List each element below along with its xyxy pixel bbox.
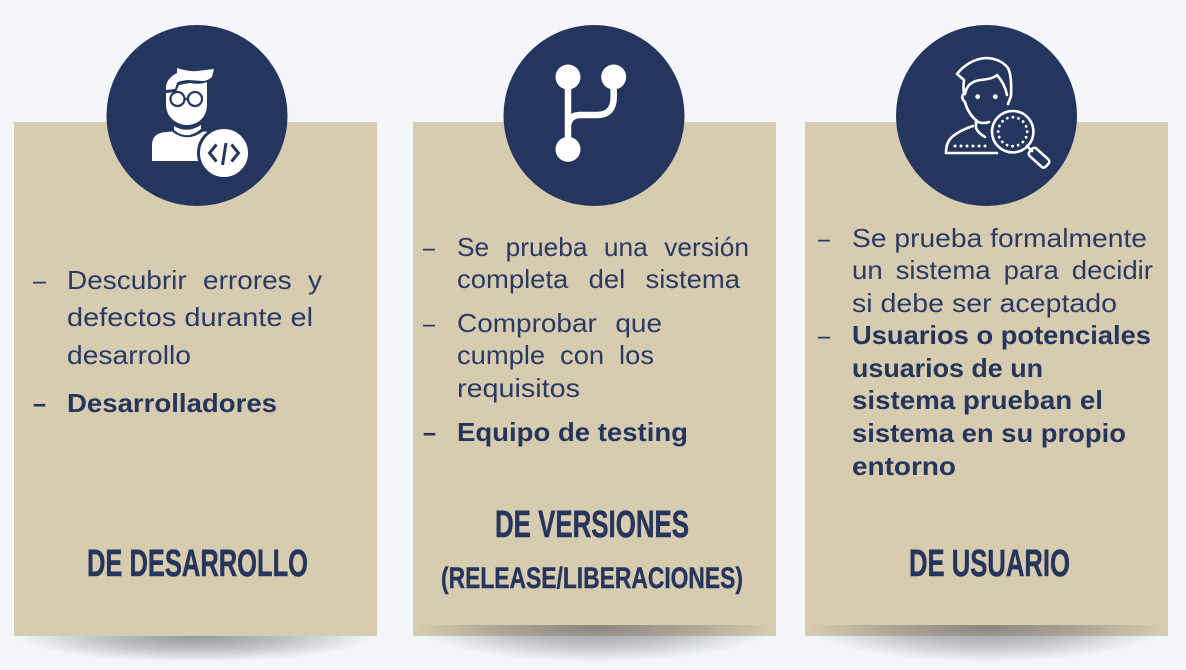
icon circle: developer (106, 25, 288, 206)
text block: description: cumple con los (457, 340, 654, 370)
heading: DE USUARIO (909, 543, 1070, 585)
text block: description: – (818, 223, 830, 253)
icon circle: branch (504, 25, 684, 206)
card background (413, 122, 776, 636)
text block: description (33, 265, 322, 418)
heading: DE DESARROLLO (87, 543, 308, 585)
card background (805, 122, 1168, 636)
text block: description (818, 223, 1153, 481)
icon circle: user with magnifier (896, 25, 1077, 206)
text block: description: – (818, 320, 830, 350)
text block: description: si debe ser aceptado (852, 288, 1117, 318)
heading: DE VERSIONES (495, 504, 689, 546)
text block: description: Usuarios o potenciales (852, 320, 1151, 350)
text block: description: requisitos (457, 373, 580, 403)
text block: description: desarrollo (67, 340, 191, 370)
text block: description: un sistema para decidir (852, 255, 1153, 285)
text block: description: completa del sistema (457, 264, 741, 294)
text block: description: Descubrir errores y (67, 265, 322, 295)
text block: description: – (423, 232, 435, 262)
text block: description: Desarrolladores (67, 388, 277, 418)
text block: description (423, 232, 749, 447)
card shadow (823, 625, 1152, 660)
panel: de versiones (413, 25, 776, 662)
panel: de usuario (805, 25, 1168, 662)
text block: description: entorno (852, 451, 956, 481)
card background (14, 122, 377, 636)
text block: description: – (423, 308, 435, 338)
card shadow (30, 636, 360, 660)
text block: description: – (33, 388, 46, 418)
heading (441, 504, 743, 595)
heading: (RELEASE/LIBERACIONES) (441, 562, 743, 595)
card shadow (431, 625, 760, 660)
text block: description: usuarios de un (852, 353, 1043, 383)
panel: de desarrollo (14, 25, 377, 662)
text block: description: defectos durante el (67, 302, 313, 332)
text block: description: Se prueba formalmente (852, 223, 1147, 253)
text block: description: sistema en su propio (852, 418, 1126, 448)
text block: description: Equipo de testing (457, 417, 688, 447)
text block: description: sistema prueban el (852, 385, 1103, 415)
text block: description: – (33, 265, 46, 295)
text block: description: Comprobar que (457, 308, 662, 338)
text block: description: – (423, 417, 436, 447)
text block: description: Se prueba una versión (457, 232, 749, 262)
